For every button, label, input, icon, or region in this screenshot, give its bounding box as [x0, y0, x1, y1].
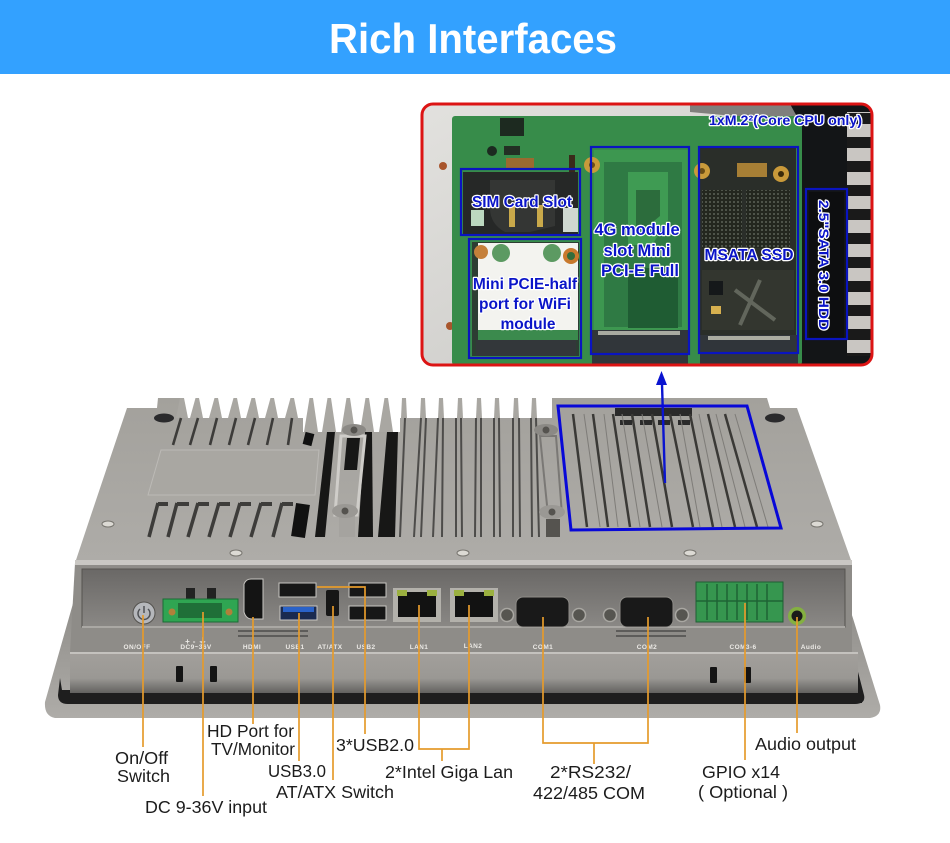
- mounting rail right: [534, 424, 565, 537]
- photo: SIM card holder: [463, 172, 578, 234]
- audio jack: [788, 607, 806, 625]
- panel: internal expansion slots photo: [422, 104, 872, 365]
- label: HD port: HD Port for: [207, 721, 294, 741]
- port labels: LAN1: [410, 644, 428, 651]
- port labels: HDMI: [243, 644, 261, 651]
- label: GPIO: GPIO x14: [702, 762, 780, 782]
- box: 4G module: [591, 147, 689, 354]
- label: M.2: 1xM.2²(Core CPU only): [709, 113, 862, 128]
- port labels: Audio: [801, 644, 821, 651]
- label: 4G module slot: slot Mini: [604, 242, 670, 260]
- photo: gold standoffs: [584, 157, 789, 182]
- power icon: [138, 606, 150, 619]
- label: COM ports: 422/485 COM: [533, 783, 645, 803]
- box: SATA HDD: [806, 189, 847, 339]
- port labels: LAN2: [464, 643, 482, 650]
- label: USB2.0: 3*USB2.0: [336, 735, 414, 755]
- access cover vents inside blue outline: [573, 408, 768, 527]
- label: GPIO: [698, 762, 788, 802]
- centre dark channels: [315, 432, 398, 537]
- device: front bezel: [45, 563, 880, 718]
- photo: dark chassis and fins on the right: [439, 104, 871, 364]
- label: USB3.0: USB3.0: [268, 761, 326, 781]
- speaker dots: [238, 630, 686, 637]
- header banner: [0, 0, 950, 74]
- port labels: ON/OFF: [124, 644, 150, 651]
- rubber feet: [154, 414, 174, 422]
- label: Giga LAN: 2*Intel Giga Lan: [385, 762, 513, 782]
- arrow to inset: [656, 371, 667, 483]
- power button: [133, 602, 155, 624]
- HDMI port: [244, 579, 263, 619]
- photo: mSATA SSD: [700, 148, 798, 364]
- port labels: COM2: [637, 644, 657, 651]
- port labels: COM1: [533, 644, 553, 651]
- label: 4G module slot: 4G module: [594, 221, 680, 239]
- label: SATA HDD: 2.5"SATA 3.0 HDD: [816, 200, 832, 330]
- centre fin grooves: [400, 418, 539, 537]
- port labels: COM3-6: [730, 644, 756, 651]
- DC terminal block: [163, 588, 238, 622]
- port labels: USB2: [357, 644, 375, 651]
- label: 4G module slot: PCI-E Full: [601, 262, 679, 280]
- label: on/off switch: [115, 748, 170, 786]
- label: mSATA SSD: MSATA SSD: [704, 247, 794, 264]
- label: GPIO: ( Optional ): [698, 782, 788, 802]
- mounting slots: [176, 666, 751, 683]
- port recess: [82, 569, 845, 627]
- upper-left vents: [173, 418, 310, 445]
- label: Mini PCIE half port: Mini PCIE-half: [473, 276, 578, 293]
- red border: [422, 104, 872, 365]
- photo: green circuit board: [452, 116, 802, 365]
- leader lines: [143, 587, 797, 796]
- label: SIM card slot: SIM Card Slot: [472, 194, 572, 211]
- box: SIM card slot: [461, 169, 580, 235]
- USB ports: [279, 583, 386, 620]
- heat sink fins: [176, 398, 537, 432]
- GPIO terminal: [696, 582, 783, 622]
- label: on/off switch: On/Off: [115, 748, 168, 768]
- photo: WiFi mini PCIe card: [472, 242, 579, 356]
- port labels: USB1: [286, 644, 304, 651]
- port labels: AT/ATX: [318, 644, 343, 651]
- port labels: + - ⏚: [185, 637, 207, 646]
- box: mini PCIe: [469, 239, 581, 358]
- port labels: DC9~36V: [180, 644, 212, 651]
- label: AT/ATX switch: AT/ATX Switch: [276, 782, 394, 802]
- blanking cover: [148, 450, 319, 495]
- port strip: [70, 563, 852, 653]
- device: rear plate with heat sink: [75, 398, 852, 565]
- mounting rail left: [332, 424, 366, 537]
- label: HD port: [207, 721, 295, 759]
- label: Mini PCIE half port: port for WiFi: [479, 296, 571, 313]
- label: COM ports: 2*RS232/: [550, 762, 631, 782]
- COM ports: [500, 597, 688, 627]
- rubber gasket: [58, 668, 864, 704]
- label: DC input: DC 9-36V input: [145, 797, 267, 817]
- label: audio output: Audio output: [755, 734, 856, 754]
- port labels: [124, 637, 821, 651]
- blue outline around access cover: [558, 406, 781, 530]
- photo: 4G module slot: [592, 150, 688, 364]
- LAN ports: [393, 588, 498, 622]
- AT/ATX switch: [326, 590, 339, 616]
- label: COM ports: [533, 762, 645, 803]
- label: HD port: TV/Monitor: [211, 739, 295, 759]
- screws: [102, 521, 823, 556]
- box: mSATA: [699, 147, 798, 353]
- lower-left vents: [149, 503, 303, 537]
- callout labels: [115, 721, 856, 817]
- label: on/off switch: Switch: [117, 766, 170, 786]
- label: Mini PCIE half port: module: [500, 316, 556, 333]
- photo: SATA connector: [809, 192, 844, 338]
- title: Rich Interfaces: [329, 15, 617, 62]
- front lower face: [70, 653, 858, 695]
